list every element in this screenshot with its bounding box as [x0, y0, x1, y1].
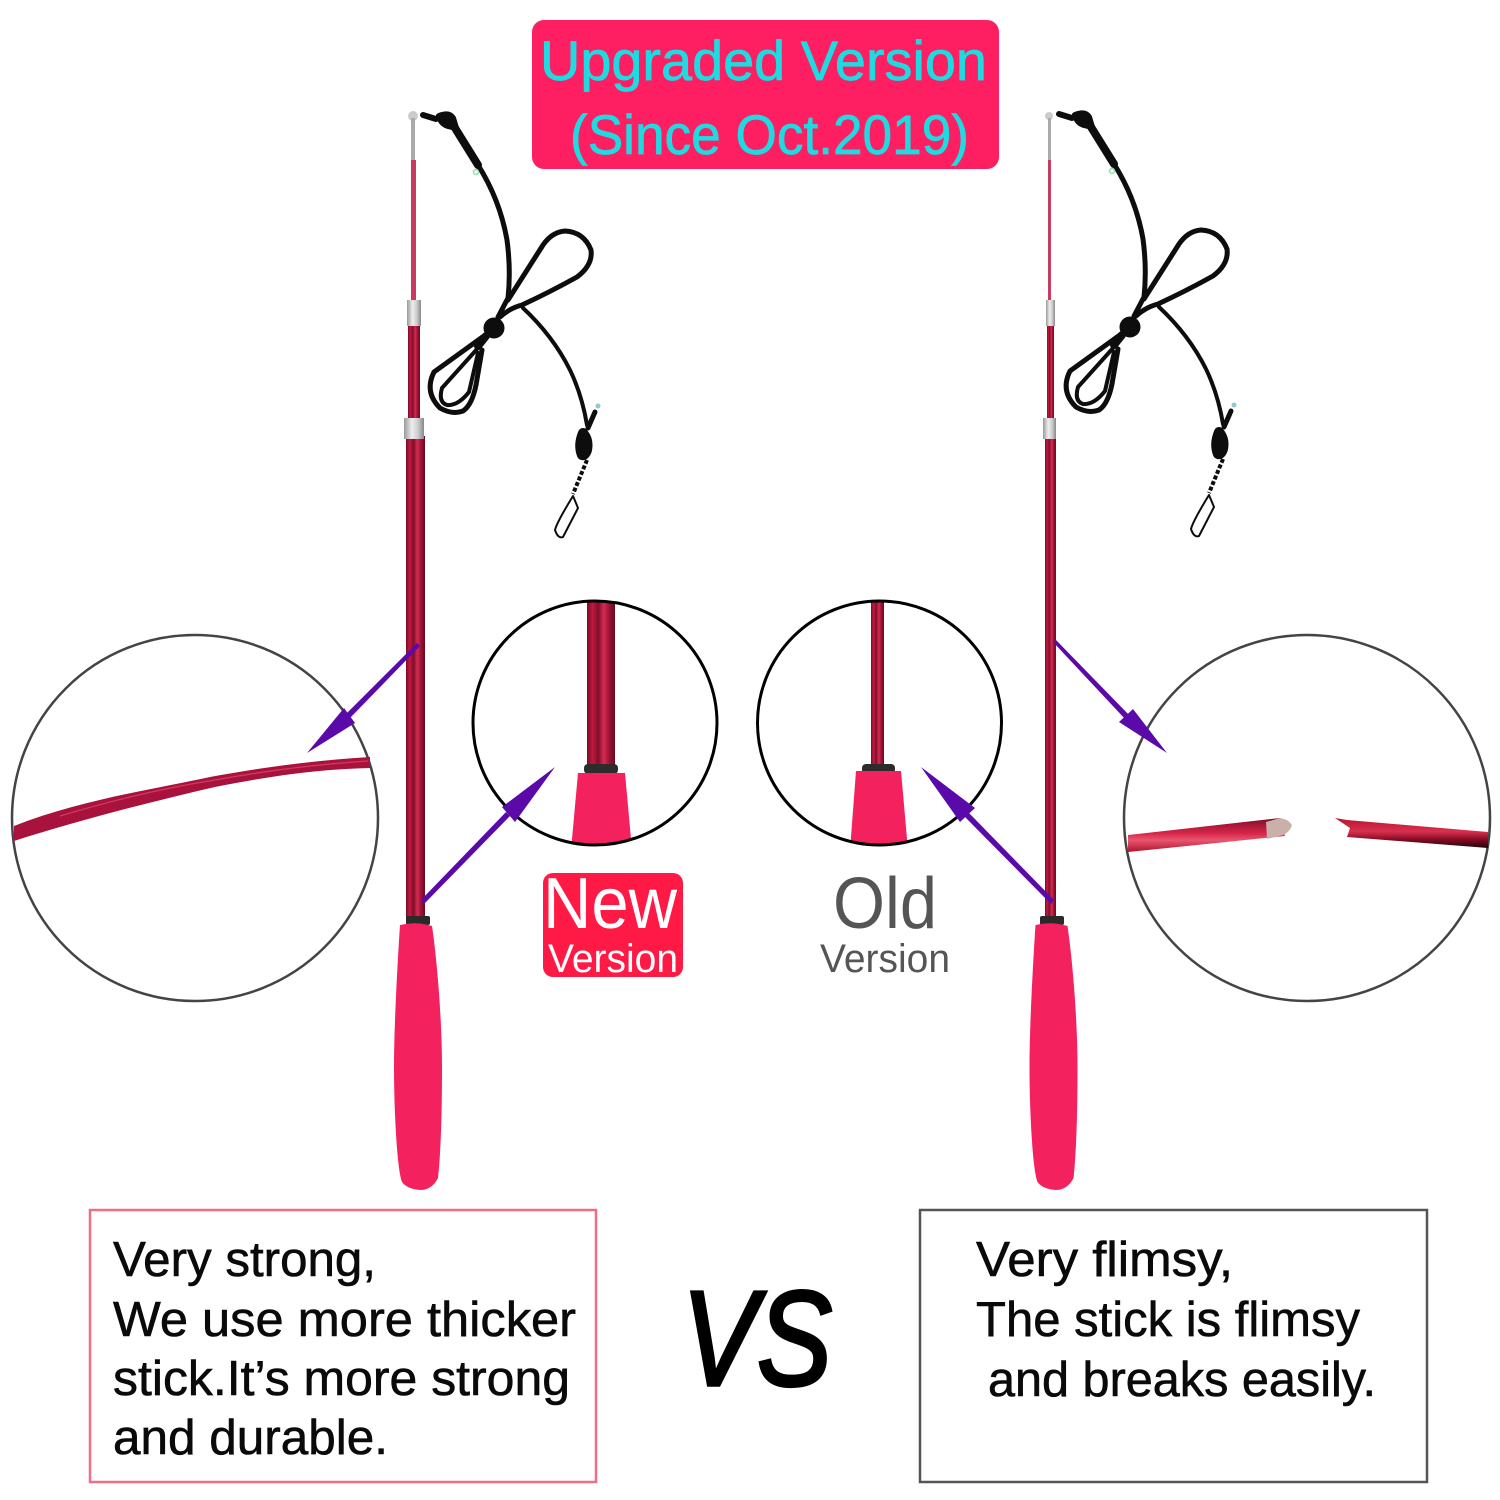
panel: new version description: Very strong,	[113, 1233, 376, 1287]
title banner: Upgraded Version	[540, 29, 987, 92]
old version rope and clip	[1059, 113, 1236, 536]
panel: old version description: and breaks easily.	[988, 1353, 1376, 1407]
new version rope and clip	[423, 114, 600, 537]
panel: new version description: stick.It’s more strong	[113, 1352, 570, 1406]
new version badge: New	[543, 864, 678, 944]
title banner	[532, 20, 999, 169]
panel: new version description: We use more thicker	[113, 1293, 576, 1347]
title banner: (Since Oct.2019)	[570, 103, 969, 166]
arrow: to thin stick	[921, 767, 1054, 904]
arrow: to thick stick	[421, 767, 555, 904]
new version badge	[543, 864, 683, 981]
magnifier: bent new stick	[12, 635, 378, 1001]
panel: old version description: The stick is flimsy	[976, 1293, 1360, 1347]
panel: old version description	[920, 1210, 1427, 1482]
magnifier: thick new stick and handle	[473, 601, 717, 850]
old version label	[820, 864, 950, 981]
panel: new version description	[90, 1210, 596, 1482]
new version wand	[394, 111, 442, 1190]
old version label: Version	[820, 937, 950, 981]
panel: old version description: Very flimsy,	[976, 1233, 1233, 1287]
old version label: Old	[833, 864, 937, 944]
old version wand	[1030, 112, 1078, 1190]
new version badge: Version	[548, 937, 678, 981]
magnifier: thin old stick and handle	[758, 601, 1002, 850]
arrow: to broken stick	[1053, 640, 1167, 753]
magnifier: broken old stick	[1124, 635, 1490, 1001]
vs label: VS	[682, 1263, 832, 1414]
panel: new version description: and durable.	[113, 1411, 388, 1465]
arrow: to bent stick	[307, 643, 420, 753]
